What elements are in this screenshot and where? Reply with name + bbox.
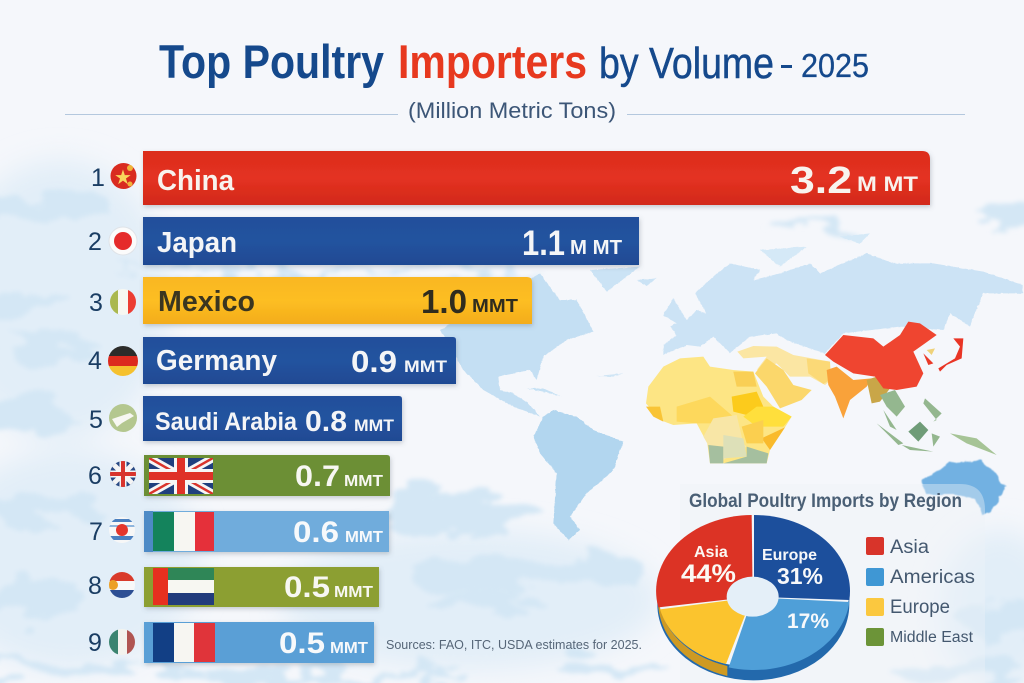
bar: Italy: MMT [345,529,383,546]
legend: Asia [890,537,929,558]
bar: China [143,151,930,205]
rank numbers [88,164,105,657]
subtitle: (Million Metric Tons) [408,98,616,123]
legend: Europe [890,597,950,618]
legend [866,537,975,646]
rank numbers: 3 [89,289,103,317]
donut chart [656,515,850,680]
flag: Italy [153,512,214,551]
flag icon: Mexico [110,289,138,315]
africa [646,357,792,463]
title: Importers [398,35,587,88]
slice label: Asia 44%: 44% [681,560,736,588]
bar: China: China [157,165,235,197]
china [825,322,937,390]
slice label: Europe 31%: 31% [777,563,823,589]
sources note: Sources: FAO, ITC, USDA estimates for 2025. [386,637,642,652]
landmass: South America [533,410,623,540]
world map [440,233,1023,540]
bar: Saudi Arabia [143,396,402,441]
bar: China: M MT [857,173,918,196]
bar: United Arab Emirates: MMT [334,584,373,601]
landmass: North America [440,267,657,417]
bar: Italy: 0.6 [293,516,339,549]
flag icon: South Korea style [109,517,135,543]
legend: Middle East [890,629,974,646]
japan [938,338,963,372]
bar: Germany: MMT [404,357,448,376]
title [159,35,869,88]
bar: United Arab Emirates: 0.5 [284,571,330,604]
flag: France [153,623,215,662]
bar: Mexico: Mexico [158,286,255,318]
bar: China: 3.2 [790,160,852,202]
bar: Japan: M MT [570,237,622,259]
rank numbers: 7 [89,518,103,546]
landmass: Australia [923,460,1007,514]
slice label: Europe 31% [762,547,823,589]
title: Top Poultry [159,35,384,88]
rank numbers: 2 [88,228,102,256]
korea [923,348,935,365]
bar: France: MMT [330,640,368,657]
bar: United Kingdom: MMT [344,473,383,490]
bar: United Kingdom [144,455,390,496]
flag icon: Germany [108,346,138,376]
rank numbers: 1 [91,164,105,192]
bar: Italy [144,511,389,552]
slice label: Asia 44% [681,544,736,588]
slice label: 17%: 17% [787,610,829,633]
slice label: Asia 44%: Asia [694,544,728,561]
title: 2025 [801,47,869,84]
bar: Mexico [143,277,532,324]
southeast asia [877,390,997,455]
flag: United Arab Emirates [153,568,214,605]
bar: France: 0.5 [279,627,325,660]
bar: United Kingdom: 0.7 [295,460,340,493]
flag icon: Italy style [109,629,135,655]
flag: United Kingdom [149,458,213,494]
slice label: Europe 31%: Europe [762,547,817,564]
south asia [827,367,872,418]
bar: United Arab Emirates [144,567,379,607]
bar: France [144,622,374,663]
bar: Japan [143,217,639,265]
bar: Saudi Arabia: Saudi Arabia [155,408,298,436]
flag icon: Japan [109,227,137,255]
bar: Mexico: 1.0 [421,283,467,320]
rank numbers: 5 [89,406,103,434]
bar: Germany: 0.9 [351,344,397,379]
rank numbers: 6 [88,462,102,490]
title: by Volume [599,39,774,88]
landmass: Eurasia [663,233,1023,355]
rank numbers: 4 [88,347,102,375]
bar: Saudi Arabia: 0.8 [305,406,347,438]
middle east [737,346,832,408]
flag icon: Saudi Arabia [109,404,137,432]
flag icon: China: ★ [114,167,132,189]
panel heading: Global Poultry Imports by Region [689,491,962,512]
rank numbers: 8 [88,572,102,600]
bar: Saudi Arabia: MMT [354,416,395,435]
bar: Japan: 1.1 [522,224,565,263]
rank numbers: 9 [88,629,102,657]
flag icon: United Kingdom [110,461,136,487]
flag icon: Netherlands style [108,572,135,598]
myanmar [867,377,890,403]
bar: Germany: Germany [156,345,277,377]
bar: Japan: Japan [157,227,237,259]
legend: Americas [890,567,975,588]
bar: Germany [143,337,456,384]
flag icon: China [110,163,136,189]
bar: Mexico: MMT [472,296,518,316]
panel: global poultry imports by region [656,484,985,683]
